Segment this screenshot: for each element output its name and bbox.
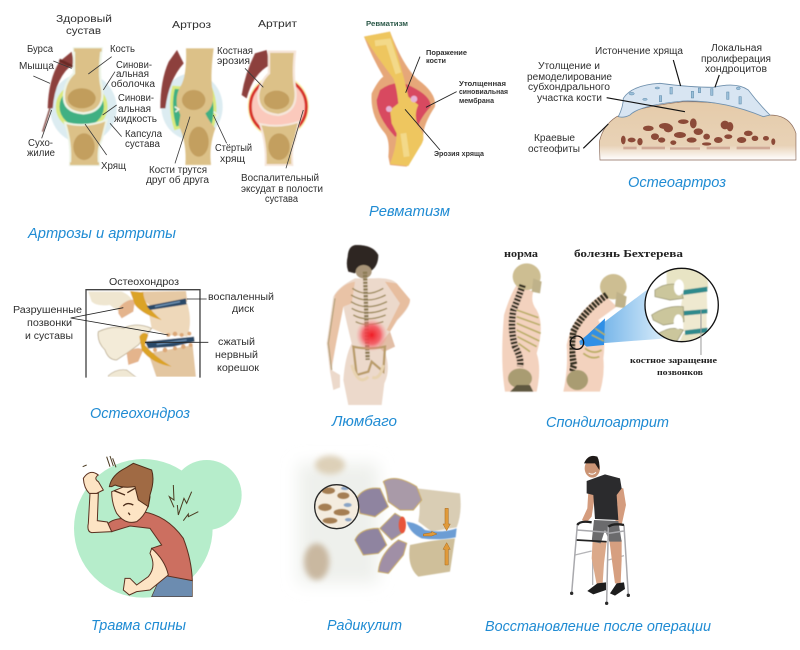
pain marks xyxy=(83,456,198,521)
rheumatism labels: Утолщенная xyxy=(459,81,506,88)
panel: rheumatism xyxy=(364,21,508,220)
joint labels: альная xyxy=(116,69,149,80)
joint labels xyxy=(19,14,323,205)
joint labels: Артроз xyxy=(172,20,212,31)
osteoarthrosis labels: Краевые xyxy=(534,133,575,144)
osteochondrosis labels: позвонки xyxy=(27,318,72,329)
caption: recovery after surgery: Восстановление после операции xyxy=(485,618,712,635)
panel: back injury xyxy=(74,456,242,634)
joint labels: Костная xyxy=(217,46,253,57)
caption: spondyloarthritis: Спондилоартрит xyxy=(546,414,669,431)
joint labels: Сухо- xyxy=(28,138,53,149)
joint diagrams xyxy=(43,48,309,165)
man with walker xyxy=(570,456,630,605)
magnified vertebrae xyxy=(645,268,718,348)
osteochondrosis labels: Остеохондроз xyxy=(109,277,179,288)
joint labels: Синови- xyxy=(118,93,154,104)
osteochondrosis labels xyxy=(13,277,274,374)
normal skeleton figure xyxy=(502,263,542,392)
joint labels: жидкость xyxy=(114,114,157,125)
face xyxy=(114,488,135,515)
lumbago figure xyxy=(327,245,410,405)
joint labels: хрящ xyxy=(220,154,245,165)
osteoarthrosis labels: участка кости xyxy=(537,93,602,104)
osteoarthrosis labels xyxy=(527,43,771,155)
joint labels: Артрит xyxy=(258,19,297,30)
rheumatism labels: Поражение xyxy=(426,50,467,57)
rheumatism labels: Эрозия хряща xyxy=(434,151,484,158)
radiculitis illustration xyxy=(298,456,461,583)
joint labels: Здоровый xyxy=(56,14,112,25)
panel: lumbago xyxy=(327,245,410,430)
vertebra body xyxy=(417,488,461,532)
caption: osteochondrosis: Остеохондроз xyxy=(90,405,190,422)
spondyloarthritis labels: костное заращение xyxy=(630,356,718,365)
shorts xyxy=(592,520,622,543)
bulging disc xyxy=(407,522,457,539)
shoulder and arm tint xyxy=(328,282,355,368)
panel: radiculitis xyxy=(298,456,461,634)
osteochondrosis labels: Разрушенные xyxy=(13,305,82,316)
body xyxy=(327,278,410,405)
raised hand xyxy=(83,472,103,493)
osteoarthrosis labels: Утолщение и xyxy=(538,61,600,72)
head xyxy=(585,459,600,478)
joint labels: Воспалительный xyxy=(241,173,319,184)
magnifier lens xyxy=(315,485,359,529)
joint labels: эрозия xyxy=(217,56,250,67)
hair xyxy=(347,245,378,273)
spondyloarthritis labels: позвонков xyxy=(657,368,704,377)
spine xyxy=(365,272,368,360)
spondyloarthritis labels: болезнь Бехтерева xyxy=(574,248,684,260)
spondyloarthritis labels: норма xyxy=(504,248,539,260)
walker feet xyxy=(570,592,630,605)
caption: rheumatism: Ревматизм xyxy=(369,203,450,220)
osteochondrosis diagram xyxy=(71,290,208,378)
joint labels: альная xyxy=(118,104,151,115)
panel: recovery after surgery xyxy=(485,456,712,635)
pain spot xyxy=(356,318,388,352)
rheumatism labels: кости xyxy=(426,58,446,65)
joint labels: Капсула xyxy=(125,129,162,140)
joint labels: Синови- xyxy=(116,60,152,71)
blue beam xyxy=(579,290,667,345)
jeans xyxy=(152,575,192,597)
rheumatism labels: мембрана xyxy=(459,97,494,105)
spondyloarthritis diagram xyxy=(502,263,718,392)
chondrocytes xyxy=(629,87,741,104)
arm bone xyxy=(328,298,335,370)
Bechterew skeleton figure xyxy=(563,274,627,392)
back walker legs xyxy=(575,551,624,585)
faded lower spots xyxy=(623,147,770,150)
joint labels: сустав xyxy=(66,26,101,37)
osteoarthrosis labels: хондроцитов xyxy=(705,64,767,75)
osteoarthrosis labels: ремоделирование xyxy=(527,72,612,83)
caption: radiculitis: Радикулит xyxy=(327,617,402,634)
arthritis joint xyxy=(242,50,309,165)
osteoarthrosis labels: Истончение хряща xyxy=(595,46,683,57)
head xyxy=(112,482,150,522)
vertebral processes xyxy=(355,478,422,573)
caption: back injury: Травма спины xyxy=(91,617,186,634)
hair xyxy=(109,463,153,507)
osteoarthrosis labels: Локальная xyxy=(711,43,762,54)
osteochondrosis labels: диск xyxy=(232,304,255,315)
washed anatomy background xyxy=(298,456,378,583)
raised arm xyxy=(88,493,112,533)
panel: arthroses and arthritis xyxy=(19,14,323,242)
joint labels: Бурса xyxy=(27,44,53,55)
rheumatism labels: Ревматизм xyxy=(366,21,408,28)
caption: lumbago: Люмбаго xyxy=(331,413,397,430)
osteochondrosis labels: корешок xyxy=(217,363,260,374)
arms xyxy=(582,487,626,525)
subchondral bone spots xyxy=(621,118,775,146)
inflamed nerve xyxy=(399,517,406,533)
osteoarthrosis labels: субхондрального xyxy=(528,81,610,93)
osteochondrosis labels: воспаленный xyxy=(208,292,274,303)
joint labels: эксудат в полости xyxy=(241,184,323,195)
osteoarthrosis diagram xyxy=(583,60,796,160)
joint labels: Кость xyxy=(110,44,135,55)
shoes xyxy=(587,582,625,596)
lower arm xyxy=(123,548,168,595)
joint labels: оболочка xyxy=(111,78,155,90)
rheumatism labels xyxy=(366,21,508,158)
osteochondrosis labels: и суставы xyxy=(25,331,73,342)
spondyloarthritis labels xyxy=(504,248,718,377)
shirt xyxy=(587,474,622,520)
joint labels: друг об друга xyxy=(146,174,209,186)
arthrosis joint xyxy=(160,48,223,165)
walker frame xyxy=(572,522,628,603)
joint leader lines xyxy=(33,57,303,168)
panel: osteoarthrosis xyxy=(527,43,796,191)
caption: osteoarthrosis: Остеоартроз xyxy=(628,174,726,191)
shirt xyxy=(107,512,192,581)
osteoarthrosis labels: остеофиты xyxy=(528,143,580,155)
compression arrows xyxy=(423,508,450,565)
joint labels: сустава xyxy=(125,139,160,150)
joint labels: Мышца xyxy=(19,61,54,72)
joint labels: Стёртый xyxy=(215,143,252,154)
rheumatism leader lines xyxy=(405,57,457,150)
panel: spondyloarthritis xyxy=(502,248,718,431)
panel: osteochondrosis xyxy=(13,277,274,422)
rheumatism labels: синовиальная xyxy=(459,89,508,96)
joint labels: Кости трутся xyxy=(149,165,207,176)
osteoarthrosis labels: пролиферация xyxy=(701,53,771,65)
rheumatism diagram xyxy=(364,32,435,167)
green background xyxy=(74,459,242,598)
back injury illustration xyxy=(83,456,198,597)
healthy joint xyxy=(43,48,117,165)
legs xyxy=(592,540,607,584)
osteochondrosis leader lines xyxy=(71,299,208,342)
osteochondrosis labels: нервный xyxy=(215,350,258,361)
joint labels: Хрящ xyxy=(101,161,126,172)
osteochondrosis labels: сжатый xyxy=(218,337,255,348)
joint labels: жилие xyxy=(27,148,55,159)
osteoarthrosis leader lines xyxy=(583,60,719,148)
joint labels: сустава xyxy=(265,194,298,205)
ribs xyxy=(351,288,387,324)
pelvis xyxy=(353,347,385,375)
caption: arthroses and arthritis: Артрозы и артриты xyxy=(27,225,176,242)
